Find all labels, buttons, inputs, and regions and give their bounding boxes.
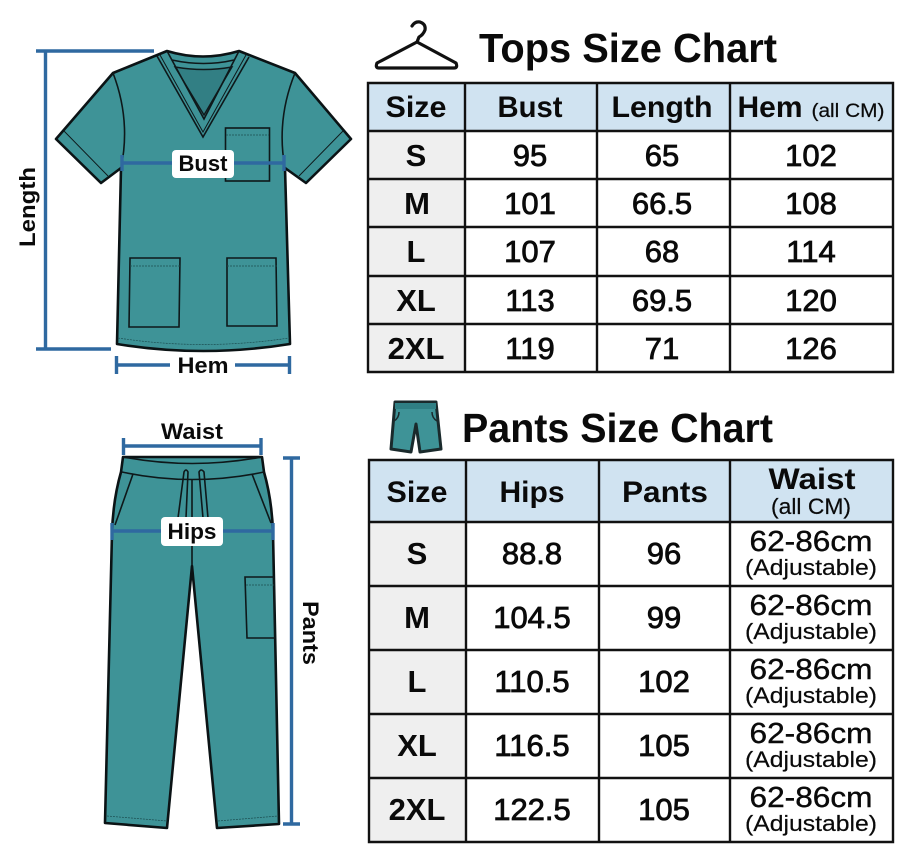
row XL: XL (397, 728, 437, 763)
scrub top garment (56, 51, 351, 351)
row S: 102 (785, 138, 837, 173)
row S: 95 (513, 138, 547, 173)
row S: 96 (647, 536, 681, 571)
row L: 68 (645, 234, 679, 269)
table cell fills (369, 460, 893, 842)
panel: pants size chart (369, 402, 893, 842)
row M: (Adjustable) (745, 619, 877, 644)
measure: hem: Hem (178, 353, 228, 378)
measure: hips: Hips (168, 519, 216, 544)
panel: scrub pants diagram (105, 419, 323, 828)
row M: M (404, 600, 430, 635)
row L (407, 234, 836, 269)
row XL: 62-86cm (750, 718, 872, 750)
row 2XL (388, 331, 837, 366)
row 2XL: 2XL (388, 331, 444, 366)
header row: Bust (498, 91, 563, 124)
measure: hem (116, 353, 290, 378)
table cell fills (368, 83, 893, 372)
measure: length: Length (15, 167, 40, 247)
row XL: 116.5 (494, 728, 570, 763)
row L: 114 (786, 234, 836, 269)
row L: 110.5 (494, 664, 570, 699)
row M: M (404, 186, 430, 221)
header row (386, 91, 884, 124)
row 2XL: 122.5 (493, 792, 571, 827)
row S (407, 526, 877, 580)
measure: length (15, 51, 154, 349)
measure: pants length (283, 458, 323, 824)
row XL: 120 (785, 283, 837, 318)
row 2XL: (Adjustable) (745, 811, 877, 836)
row S: 65 (645, 138, 679, 173)
row M: 108 (785, 186, 837, 221)
row L: L (407, 234, 425, 269)
row M: 62-86cm (750, 590, 872, 622)
row L: L (408, 664, 426, 699)
header row (386, 463, 856, 519)
header row: Pants (622, 476, 708, 509)
row 2XL (389, 782, 877, 836)
measure: pants length: Pants (298, 601, 323, 665)
row L: 62-86cm (750, 654, 872, 686)
measure: waist: Waist (161, 419, 224, 444)
row L: 107 (504, 234, 556, 269)
row XL (396, 283, 837, 318)
row M: 99 (647, 600, 681, 635)
header row: Waist (768, 463, 856, 496)
row S: S (407, 536, 427, 571)
header row: (all CM) (812, 101, 884, 122)
chest pocket (226, 128, 270, 181)
row S (406, 138, 837, 173)
table: pants sizes (369, 460, 893, 842)
row S: 62-86cm (750, 526, 872, 558)
row M: 66.5 (632, 186, 692, 221)
row M: 101 (504, 186, 556, 221)
row 2XL: 62-86cm (750, 782, 872, 814)
row S: (Adjustable) (745, 555, 877, 580)
lower left pocket (129, 258, 180, 327)
table: tops sizes (368, 83, 893, 372)
header row: Size (386, 91, 446, 124)
row 2XL: 119 (505, 331, 555, 366)
cargo pocket (245, 577, 275, 638)
row 2XL: 105 (638, 792, 690, 827)
icon: hanger (376, 22, 457, 68)
row M: 104.5 (493, 600, 571, 635)
row XL: XL (396, 283, 436, 318)
row XL: 105 (638, 728, 690, 763)
row XL: (Adjustable) (745, 747, 877, 772)
row L: (Adjustable) (745, 683, 877, 708)
panel: tops size chart (368, 22, 893, 372)
row L (408, 654, 877, 708)
row S: S (406, 138, 426, 173)
row L: 102 (638, 664, 690, 699)
row XL: 113 (505, 283, 555, 318)
row S: 88.8 (502, 536, 562, 571)
heading: pants size chart: Pants Size Chart (462, 405, 773, 451)
header row: Hem (738, 91, 802, 124)
row XL: 69.5 (632, 283, 692, 318)
header row: Length (612, 91, 712, 124)
row 2XL: 71 (645, 331, 679, 366)
heading: tops size chart: Tops Size Chart (479, 25, 777, 71)
header row: Hips (500, 476, 564, 509)
header row: Size (386, 476, 448, 509)
panel: scrub top diagram (15, 51, 351, 378)
header row: (all CM) (771, 494, 851, 519)
row 2XL: 126 (785, 331, 837, 366)
measure: waist (124, 419, 261, 455)
row M (404, 590, 877, 644)
icon: pants (391, 402, 441, 452)
scrub pants garment (105, 457, 279, 828)
measure: hips (112, 517, 273, 546)
row M (404, 186, 837, 221)
row XL (397, 718, 877, 772)
row 2XL: 2XL (389, 792, 445, 827)
measure: bust (122, 150, 284, 178)
measure: bust: Bust (178, 151, 228, 176)
lower right pocket (227, 258, 277, 326)
